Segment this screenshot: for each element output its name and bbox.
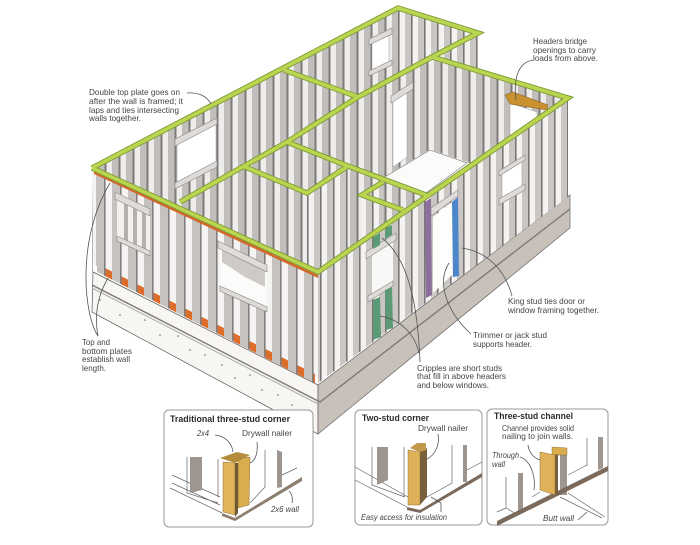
gray studs bbox=[377, 445, 467, 485]
top plates bbox=[92, 8, 568, 272]
callout: cripples bbox=[380, 238, 506, 390]
floor bbox=[383, 150, 467, 193]
callout: king stud: window framing together. bbox=[507, 306, 599, 315]
door opening: central partition bbox=[391, 82, 413, 167]
callout: king stud bbox=[462, 248, 599, 315]
wall: right front wall bbox=[318, 98, 568, 383]
window: back wall bbox=[175, 118, 217, 189]
callout: top and bottom plates: length. bbox=[82, 364, 106, 373]
wall: closet bbox=[362, 182, 383, 270]
callout: headers: Headers bridge bbox=[533, 37, 587, 46]
upper orange plate bbox=[94, 171, 318, 278]
bottom plate: orange bbox=[97, 264, 315, 383]
panel: three-stud channel bbox=[487, 409, 608, 526]
channel studs bbox=[540, 447, 567, 495]
wall: small room back bbox=[287, 142, 426, 280]
callout: trimmer bbox=[444, 263, 547, 349]
wall: room back wall bbox=[432, 57, 568, 197]
base plate bbox=[222, 477, 302, 521]
callout: king stud: King stud ties door or bbox=[508, 297, 585, 306]
window: right bbox=[499, 155, 525, 205]
callout: cripples: Cripples are short studs bbox=[417, 364, 502, 373]
panel: two-stud corner: Easy access for insulation bbox=[361, 513, 447, 522]
wall lines bbox=[355, 445, 482, 507]
labels: Drywall nailer bbox=[418, 424, 468, 433]
wall: long back wall bbox=[92, 8, 398, 272]
callout: top and bottom plates bbox=[82, 183, 132, 373]
window: left 1 bbox=[115, 192, 150, 256]
base plate bbox=[497, 466, 608, 526]
callout: cripples: that fill in above headers bbox=[417, 372, 506, 381]
wall lines bbox=[170, 450, 297, 513]
heading: Traditional three-stud corner bbox=[170, 414, 290, 425]
callout: double top plate: after the wall is framed; it bbox=[89, 97, 184, 106]
callout: top and bottom plates: bottom plates bbox=[82, 347, 132, 356]
panel: two-stud corner bbox=[355, 410, 482, 525]
note: Channel provides solid bbox=[502, 424, 574, 433]
wall: rear partition outer face bbox=[432, 33, 478, 120]
wall: rear end wall bbox=[398, 8, 478, 130]
callout: cripples: and below windows. bbox=[417, 381, 489, 390]
callout: trimmer: Trimmer or jack stud bbox=[473, 331, 547, 340]
panel: three-stud channel: Butt wall bbox=[543, 514, 574, 523]
callout: double top plate: walls together. bbox=[88, 114, 141, 123]
heading: Two-stud corner bbox=[362, 413, 429, 424]
callout: headers bbox=[515, 37, 598, 100]
callout: double top plate: Double top plate goes on bbox=[89, 88, 180, 97]
panel: three-stud channel: nailing to join walls. bbox=[502, 432, 573, 441]
callout: double top plate bbox=[88, 88, 211, 123]
panel: traditional three-stud corner: 2x6 wall bbox=[270, 505, 299, 514]
callout: double top plate: laps and ties intersecting bbox=[89, 106, 179, 115]
callout: headers: loads from above. bbox=[533, 54, 598, 63]
panel: traditional three-stud corner bbox=[164, 410, 313, 527]
gray studs bbox=[190, 450, 282, 493]
corner studs bbox=[408, 443, 427, 505]
labels: Through bbox=[492, 451, 519, 460]
callout: headers: openings to carry bbox=[533, 46, 597, 55]
panel: traditional three-stud corner: Drywall nailer bbox=[242, 429, 292, 438]
corner studs bbox=[220, 452, 250, 517]
wall lines bbox=[497, 438, 605, 518]
heading: Three-stud channel bbox=[494, 411, 573, 422]
callout: top and bottom plates: Top and bbox=[82, 338, 110, 347]
door opening with king and trimmer studs bbox=[425, 190, 459, 298]
wall: left front wall bbox=[92, 170, 318, 383]
gray studs bbox=[518, 437, 603, 513]
panel: three-stud channel: wall bbox=[492, 460, 505, 469]
callout: trimmer: supports header. bbox=[473, 340, 532, 349]
wall: small room outer bbox=[307, 166, 348, 290]
header opening: back wall bbox=[505, 92, 548, 170]
callout: top and bottom plates: establish wall bbox=[82, 355, 130, 364]
wall: small room left bbox=[243, 166, 307, 290]
base plate bbox=[407, 473, 482, 513]
window: rear wall bbox=[369, 28, 392, 76]
foundation bbox=[92, 195, 570, 434]
labels: 2x4 bbox=[196, 429, 209, 438]
header: orange bbox=[505, 92, 548, 110]
wall: rear cross partition bbox=[284, 70, 358, 190]
wall: central partition bbox=[180, 57, 432, 300]
window: left 2 bbox=[218, 241, 267, 312]
window: green cripples bbox=[366, 225, 396, 340]
